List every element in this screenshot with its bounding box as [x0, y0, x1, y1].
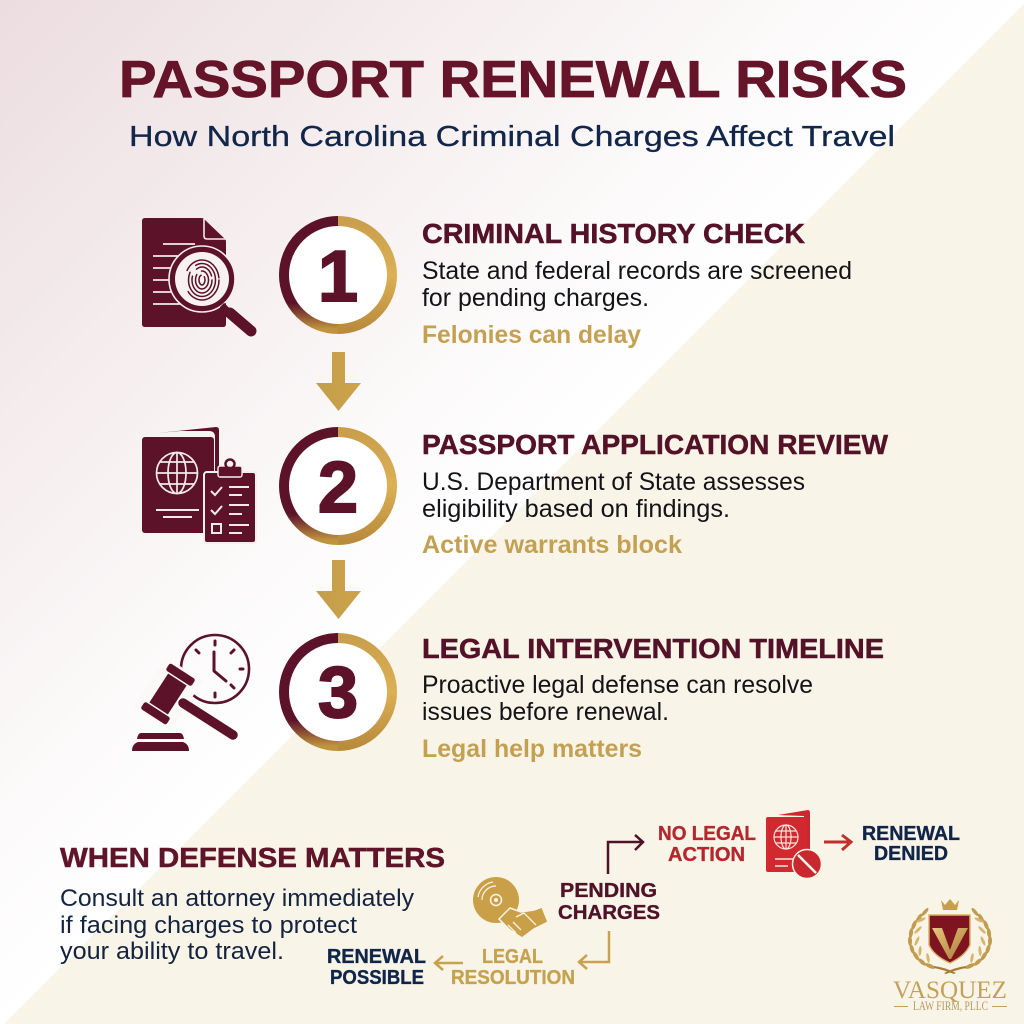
logo shield: [929, 915, 970, 963]
label: legal resolution: [451, 946, 575, 989]
logo tagline: LAW FIRM, PLLC: [913, 999, 988, 1013]
label: no legal action: NO LEGAL: [658, 823, 756, 845]
step 1 number ring: [284, 221, 392, 329]
label: renewal possible: [327, 946, 426, 989]
step 3 number ring: 3: [318, 653, 358, 733]
label: no legal action: [658, 823, 756, 866]
step 3 text: issues before renewal.: [422, 698, 669, 726]
arrow: to renewal possible: [435, 956, 463, 970]
logo name: VASQUEZ: [893, 977, 1007, 1004]
step 3 text: Proactive legal defense can resolve: [422, 671, 813, 699]
arrow: step 1 to 2: [316, 352, 361, 411]
icon: denied passport: [766, 810, 822, 878]
arrow: to renewal denied: [824, 835, 851, 850]
defense text block: if facing charges to protect: [60, 912, 357, 939]
label: renewal denied: RENEWAL: [862, 823, 960, 845]
step 1 text: [422, 218, 852, 349]
label: renewal possible: RENEWAL: [327, 946, 426, 968]
subtitle: How North Carolina Criminal Charges Affect Travel: [129, 121, 895, 153]
title: PASSPORT RENEWAL RISKS: [119, 51, 907, 109]
logo: Vasquez Law Firm: [893, 899, 1007, 1013]
icon: disc and handshake: [473, 877, 548, 938]
label: legal resolution: LEGAL: [482, 946, 543, 968]
step 3 text: Legal help matters: [422, 735, 642, 763]
label: renewal denied: DENIED: [874, 843, 948, 865]
label: no legal action: ACTION: [668, 844, 745, 866]
step 2 text: U.S. Department of State assesses: [422, 468, 805, 496]
step 1 text: for pending charges.: [422, 284, 649, 312]
defense text block: Consult an attorney immediately: [60, 885, 415, 912]
step 2 text: Active warrants block: [422, 531, 682, 559]
step 1 text: Felonies can delay: [422, 321, 641, 349]
step 1 text: State and federal records are screened: [422, 257, 852, 285]
heading: when defense matters: WHEN DEFENSE MATTERS: [60, 842, 445, 873]
arrow: pending to no legal action: [608, 835, 643, 874]
label: renewal possible: POSSIBLE: [330, 967, 424, 989]
arrow: step 2 to 3: [316, 560, 361, 619]
step 3 text: [422, 633, 884, 763]
step 3 text: LEGAL INTERVENTION TIMELINE: [422, 633, 884, 664]
icon: document with fingerprint magnifier: [142, 218, 251, 331]
label: legal resolution: RESOLUTION: [451, 967, 575, 989]
step 2 text: PASSPORT APPLICATION REVIEW: [422, 429, 888, 460]
step 2 text: [422, 429, 888, 559]
logo crown: [941, 899, 959, 910]
icon: gavel and clock: [132, 635, 249, 751]
step 1 number ring: 1: [318, 237, 358, 317]
defense text block: [60, 885, 415, 965]
step 1 text: CRIMINAL HISTORY CHECK: [422, 218, 805, 249]
defense text block: your ability to travel.: [60, 938, 284, 965]
icon: passport with checklist: [142, 427, 256, 543]
label: renewal denied: [862, 823, 960, 865]
step 2 number ring: 2: [318, 448, 358, 528]
label: pending charges: CHARGES: [558, 902, 660, 924]
step 3 number ring: [284, 638, 392, 746]
logo wreath: [908, 907, 992, 974]
step 2 text: eligibility based on findings.: [422, 495, 730, 523]
label: pending charges: PENDING: [560, 880, 657, 902]
label: pending charges: [558, 880, 660, 924]
arrow: pending to legal resolution: [579, 931, 609, 969]
step 2 number ring: [284, 432, 392, 540]
